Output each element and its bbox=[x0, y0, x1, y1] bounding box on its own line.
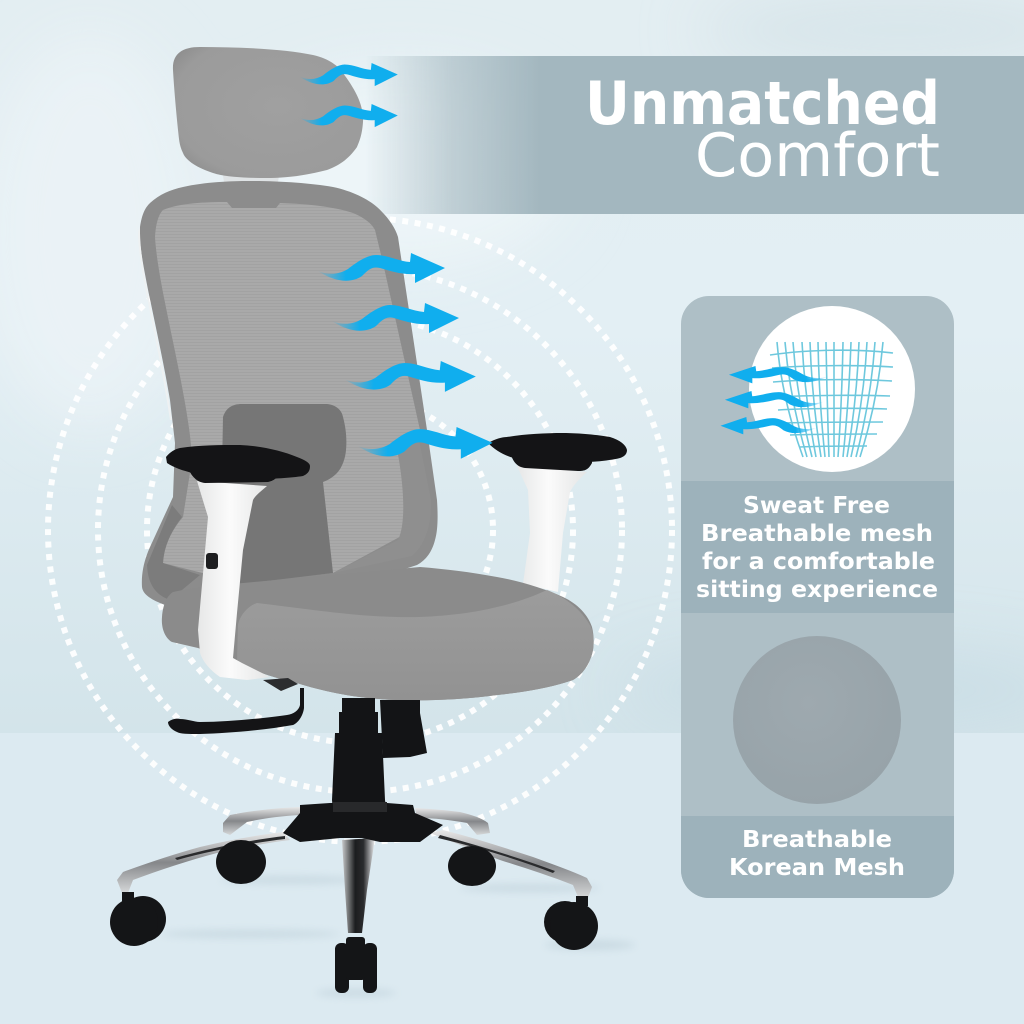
title bbox=[585, 69, 940, 191]
left armrest bbox=[166, 445, 310, 680]
icon: mesh airflow bbox=[720, 306, 915, 472]
front chrome arms bbox=[117, 830, 592, 933]
background wall bbox=[0, 0, 1024, 734]
casters bbox=[110, 840, 598, 993]
caption band: sweat free bbox=[681, 481, 954, 613]
floor bbox=[0, 733, 1024, 1024]
icon: fabric swatch bbox=[733, 636, 901, 804]
tag under seat bbox=[263, 678, 298, 691]
dotted concentric circles bbox=[48, 218, 672, 842]
chair base bbox=[117, 802, 592, 933]
caption band: sweat free: Sweat Free bbox=[743, 493, 890, 519]
caption band: korean mesh: Korean Mesh bbox=[729, 855, 905, 881]
features panel bbox=[681, 296, 954, 898]
caption band: sweat free: sitting experience bbox=[696, 577, 938, 603]
caption band: sweat free: Breathable mesh bbox=[701, 521, 933, 547]
seat cushion bbox=[162, 567, 594, 700]
floor shadows bbox=[160, 876, 635, 997]
caption band: korean mesh: Breathable bbox=[742, 827, 892, 853]
airflow arrows on headrest and backrest bbox=[300, 63, 493, 459]
background light glow bbox=[0, 0, 1024, 730]
office chair bbox=[110, 47, 635, 997]
caption band: korean mesh bbox=[681, 816, 954, 898]
right armrest bbox=[488, 433, 627, 592]
caption band: sweat free: for a comfortable bbox=[702, 549, 935, 575]
mesh backrest bbox=[138, 181, 438, 605]
gas lift bbox=[332, 698, 427, 812]
headrest bbox=[173, 47, 363, 182]
tilt lever bbox=[168, 688, 304, 734]
lumbar support bbox=[210, 404, 346, 584]
title: Comfort bbox=[695, 121, 940, 191]
title: Unmatched bbox=[585, 69, 940, 139]
rear chrome arms bbox=[223, 807, 490, 835]
heading band bbox=[365, 56, 1024, 214]
